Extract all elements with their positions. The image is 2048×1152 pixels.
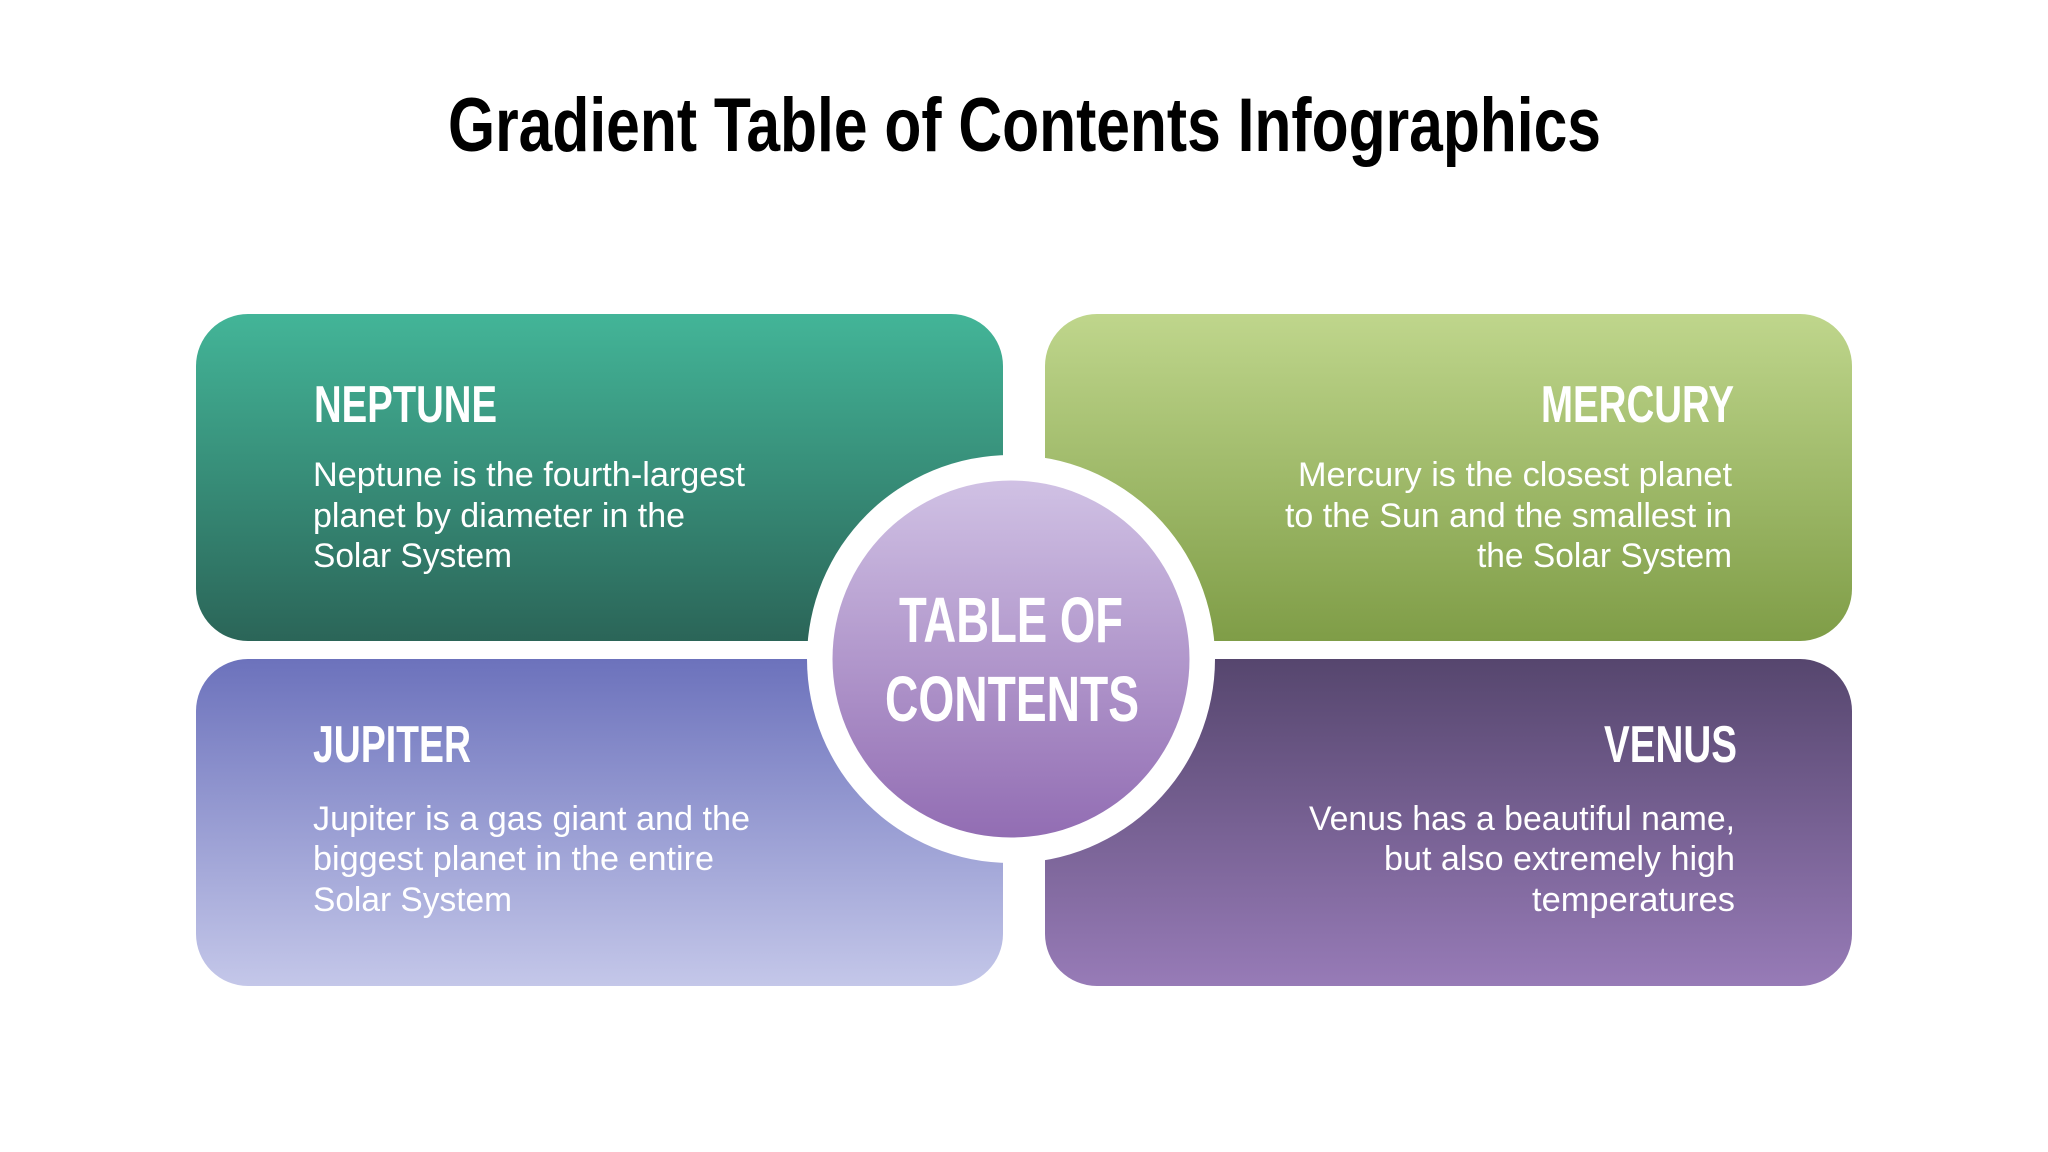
- heading: Neptune: NEPTUNE: [314, 376, 497, 434]
- description: Mercury: Mercury is the closest planet: [1298, 456, 1733, 494]
- gradient circle: [832, 480, 1190, 838]
- description: Jupiter: Jupiter is a gas giant and the: [313, 800, 750, 838]
- description: Neptune: planet by diameter in the: [313, 497, 685, 535]
- description: Venus: [1309, 800, 1735, 919]
- center label: TABLE OF: [899, 584, 1123, 656]
- description: Mercury: the Solar System: [1477, 537, 1732, 575]
- description: Neptune: [313, 456, 746, 575]
- center label: CONTENTS: [885, 663, 1139, 735]
- card background: Mercury: [1045, 314, 1852, 641]
- panel: Jupiter: [196, 659, 1003, 986]
- heading: Jupiter: JUPITER: [313, 716, 471, 774]
- panel: Venus: [1045, 659, 1852, 986]
- card background: Jupiter: [196, 659, 1003, 986]
- center badge: table of contents: [807, 455, 1215, 863]
- description: Jupiter: Solar System: [313, 881, 512, 919]
- heading: Mercury: MERCURY: [1541, 376, 1734, 434]
- white ring: [807, 455, 1215, 863]
- center label: [885, 584, 1139, 735]
- description: Neptune: Solar System: [313, 537, 512, 575]
- description: Jupiter: [313, 800, 750, 919]
- panel: Mercury: [1045, 314, 1852, 641]
- description: Jupiter: biggest planet in the entire: [313, 840, 714, 878]
- description: Venus: but also extremely high: [1384, 840, 1735, 878]
- card background: Venus: [1045, 659, 1852, 986]
- description: Venus: temperatures: [1532, 881, 1735, 919]
- heading: Venus: VENUS: [1604, 716, 1737, 774]
- title: Gradient Table of Contents Infographics: [448, 83, 1601, 168]
- description: Mercury: to the Sun and the smallest in: [1285, 497, 1732, 535]
- description: Mercury: [1285, 456, 1733, 575]
- card background: Neptune: [196, 314, 1003, 641]
- description: Venus: Venus has a beautiful name,: [1309, 800, 1735, 838]
- panel: Neptune: [196, 314, 1003, 641]
- description: Neptune: Neptune is the fourth-largest: [313, 456, 746, 494]
